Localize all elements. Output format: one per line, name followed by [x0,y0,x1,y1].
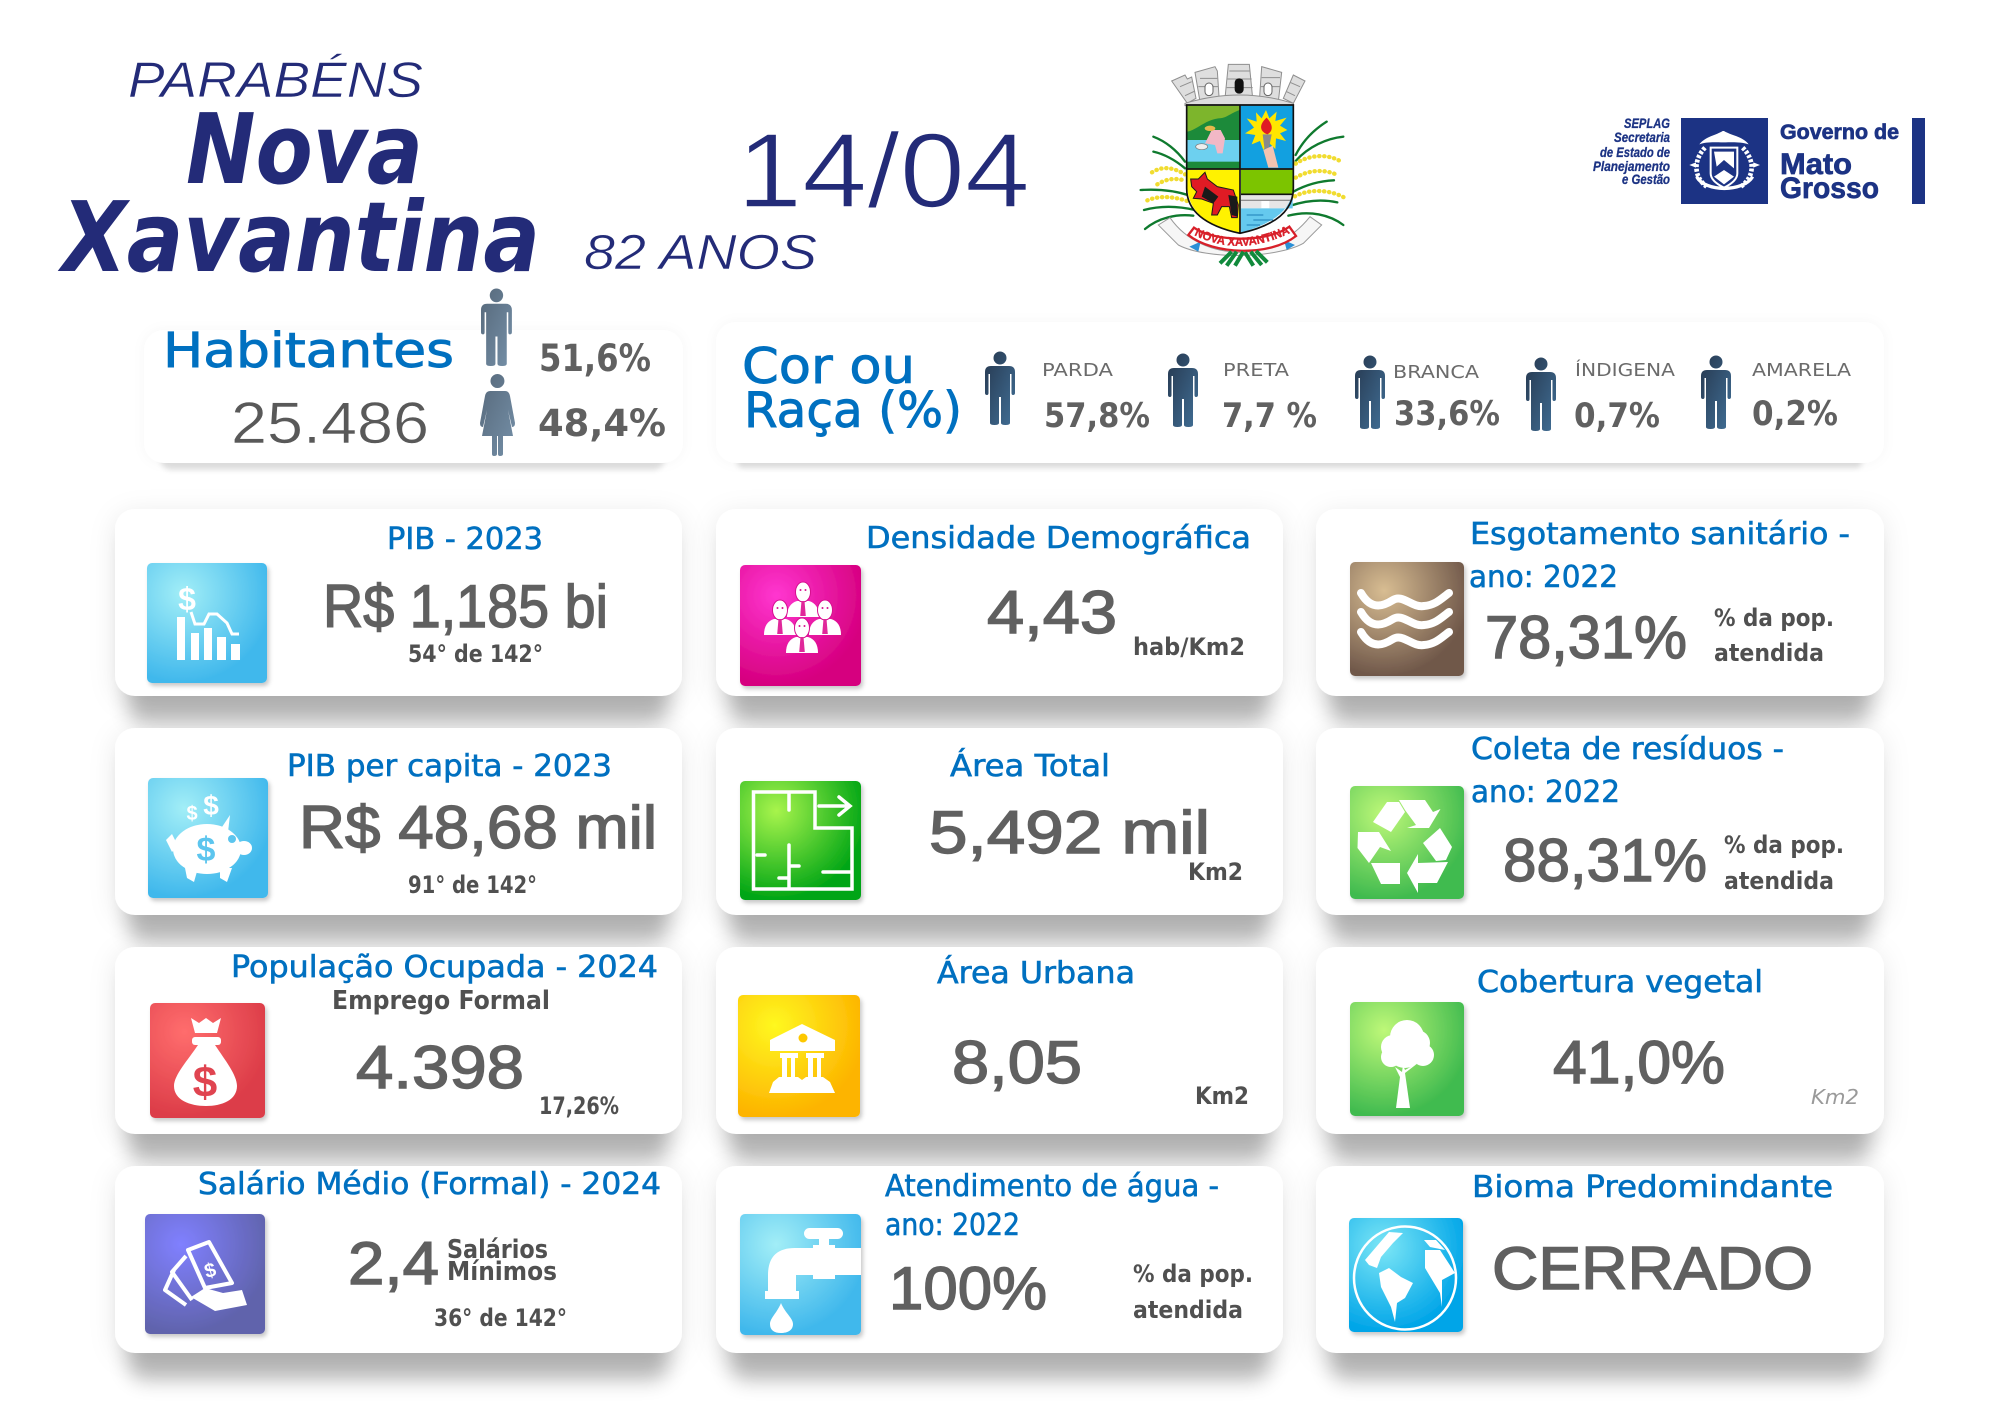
panel: população ocupada: 17,26% [539,1092,619,1120]
title: PARABÉNS Nova Xavantina: Nova [186,93,423,206]
panel: esgotamento sanitário: % da pop. [1714,604,1834,632]
leaves [1141,122,1343,229]
item: indígena [1526,358,1676,436]
icon: piggy bank: $ [203,790,219,821]
title: PARABÉNS Nova Xavantina [58,52,540,294]
icon: money in hand: $ [202,1259,218,1283]
icon: municipal coat of arms [1140,64,1346,267]
panel: bioma predominante: CERRADO [1492,1235,1813,1302]
ribbon [1158,217,1322,255]
item: preta [1168,354,1317,436]
icon: floor plan [740,781,861,900]
item: indígena: ÍNDIGENA [1575,359,1676,381]
panel: PIB per capita: R$ 48,68 mil [299,794,657,861]
crown [1172,64,1305,106]
logo: SEPLAG Governo de Mato Grosso: de Estado de [1600,144,1670,160]
item: branca: 33,6% [1394,394,1500,434]
subtitle: 82 anos: 82 ANOS [584,226,817,280]
logo: SEPLAG Governo de Mato Grosso: Mato [1780,148,1852,181]
icon: piggy bank [148,778,268,898]
panel: coleta de resíduos: % da pop. [1724,831,1844,859]
heading: Cor ou Raça (%): Raça (%) [744,382,962,439]
item: amarela: 0,2% [1752,394,1838,434]
icon: municipal coat of arms: NOVA XAVANTINA [1194,226,1290,246]
panel: bioma predominante [1316,1166,1884,1353]
panel: PIB: PIB - 2023 [387,522,543,557]
panel: área total [716,728,1283,915]
item: parda [985,352,1150,436]
icon: globe [1349,1218,1463,1332]
panel: cobertura vegetal: 41,0% [1553,1029,1725,1096]
panel: coleta de resíduos: Coleta de resíduos - [1471,732,1784,767]
panel: atendimento de água: 100% [889,1255,1047,1322]
icon: piggy bank: $ [197,831,216,869]
panel: PIB per capita: 91° de 142° [408,871,537,899]
panel: salário médio: 36° de 142° [434,1304,567,1332]
panel: habitantes [144,289,683,463]
panel: população ocupada: População Ocupada - 2024 [231,950,658,985]
icon: piggy bank: $ [186,803,198,825]
panel: salário médio: 2,4 [348,1230,439,1297]
panel: área urbana: Km2 [1195,1082,1249,1110]
panel: população ocupada [115,947,682,1134]
panel: salário médio: Mínimos [447,1257,557,1287]
icon: water tap [740,1214,861,1335]
panel: área urbana: 8,05 [952,1029,1082,1096]
title: PARABÉNS Nova Xavantina: Xavantina [58,181,540,294]
panel: cor ou raça [716,322,1884,463]
panel: cobertura vegetal [1316,947,1884,1134]
panel: densidade demográfica: 4,43 [987,579,1117,646]
icon: recycle [1350,786,1464,899]
item: branca: BRANCA [1393,362,1480,383]
date: 14/04: 14/04 [737,112,1030,230]
panel: densidade demográfica: Densidade Demográfica [866,521,1251,556]
panel: coleta de resíduos: atendida [1724,867,1834,895]
panel: PIB per capita: PIB per capita - 2023 [287,749,612,784]
panel: cobertura vegetal: Km2 [1811,1085,1859,1109]
icon: male figure [481,289,512,366]
panel: área total: Km2 [1188,858,1243,886]
panel: bioma predominante: Bioma Predomindante [1472,1170,1833,1205]
heading: Habitantes: Habitantes [163,323,454,379]
panel: densidade demográfica: hab/Km2 [1133,633,1245,661]
value: population: 25.486 [231,391,429,456]
icon: building [738,995,860,1117]
panel: salário médio [115,1166,682,1353]
icon: money in hand [145,1214,265,1334]
panel: área total: Área Total [950,748,1110,784]
panel: coleta de resíduos: 88,31% [1503,827,1707,894]
logo: SEPLAG Governo de Mato Grosso: Governo de [1780,121,1899,144]
logo: SEPLAG Governo de Mato Grosso: Secretaria [1614,129,1670,145]
icon: waves [1350,562,1464,676]
panel: PIB per capita [115,728,682,915]
panel: PIB: 54° de 142° [408,640,543,668]
icon: chart [147,563,267,683]
item: branca [1355,356,1500,434]
panel: atendimento de água [716,1166,1283,1353]
panel: área urbana [716,947,1283,1134]
item: amarela [1701,356,1852,434]
icon: chart: $ [178,581,196,617]
panel: área total: 5,492 mil [929,799,1210,866]
icon: people [740,565,861,686]
icon: money bag: $ [193,1058,217,1107]
panel: atendimento de água: ano: 2022 [885,1208,1020,1243]
icon: tree [1350,1002,1464,1116]
item: parda: 57,8% [1044,396,1150,436]
panel: coleta de resíduos: ano: 2022 [1471,775,1620,810]
panel: atendimento de água: atendida [1133,1296,1243,1324]
panel: coleta de resíduos [1316,728,1884,915]
panel: salário médio: Salário Médio (Formal) - 2024 [198,1167,661,1202]
shield [1187,105,1293,233]
item: preta: PRETA [1223,360,1290,381]
panel: salário médio: Salários [447,1235,548,1265]
panel: PIB: R$ 1,185 bi [323,573,608,640]
icon: female figure [480,374,515,456]
logo: SEPLAG Governo de Mato Grosso: Grosso [1780,172,1879,205]
panel: atendimento de água: % da pop. [1133,1260,1253,1288]
logo: SEPLAG Governo de Mato Grosso: e Gestão [1622,171,1670,187]
wheat [1147,156,1347,202]
value: female share: 48,4% [538,402,666,445]
panel: população ocupada: 4.398 [356,1034,524,1101]
logo: SEPLAG Governo de Mato Grosso: Planejamento [1593,158,1670,174]
title: PARABÉNS Nova Xavantina: PARABÉNS [128,52,423,108]
panel: esgotamento sanitário: Esgotamento sanitário - [1470,517,1850,552]
item: preta: 7,7 % [1222,396,1317,436]
panel: PIB [115,509,682,696]
panel: cobertura vegetal: Cobertura vegetal [1477,965,1763,1000]
panel: área urbana: Área Urbana [937,955,1135,991]
value: male share: 51,6% [539,337,651,380]
panel: esgotamento sanitário: 78,31% [1485,604,1687,671]
logo: SEPLAG Governo de Mato Grosso [1593,115,1925,205]
heading: Cor ou Raça (%) [742,338,962,439]
heading: Cor ou Raça (%): Cor ou [742,338,915,395]
item: indígena: 0,7% [1574,396,1660,436]
panel: esgotamento sanitário [1316,509,1884,696]
icon: money bag [150,1003,265,1118]
item: parda: PARDA [1042,360,1114,381]
panel: esgotamento sanitário: atendida [1714,639,1824,667]
panel: atendimento de água: Atendimento de água - [885,1169,1219,1204]
item: amarela: AMARELA [1752,360,1852,381]
logo: SEPLAG Governo de Mato Grosso: SEPLAG [1624,115,1670,131]
panel: densidade demográfica [716,509,1283,696]
panel: população ocupada: Emprego Formal [332,986,550,1016]
panel: esgotamento sanitário: ano: 2022 [1469,560,1618,595]
